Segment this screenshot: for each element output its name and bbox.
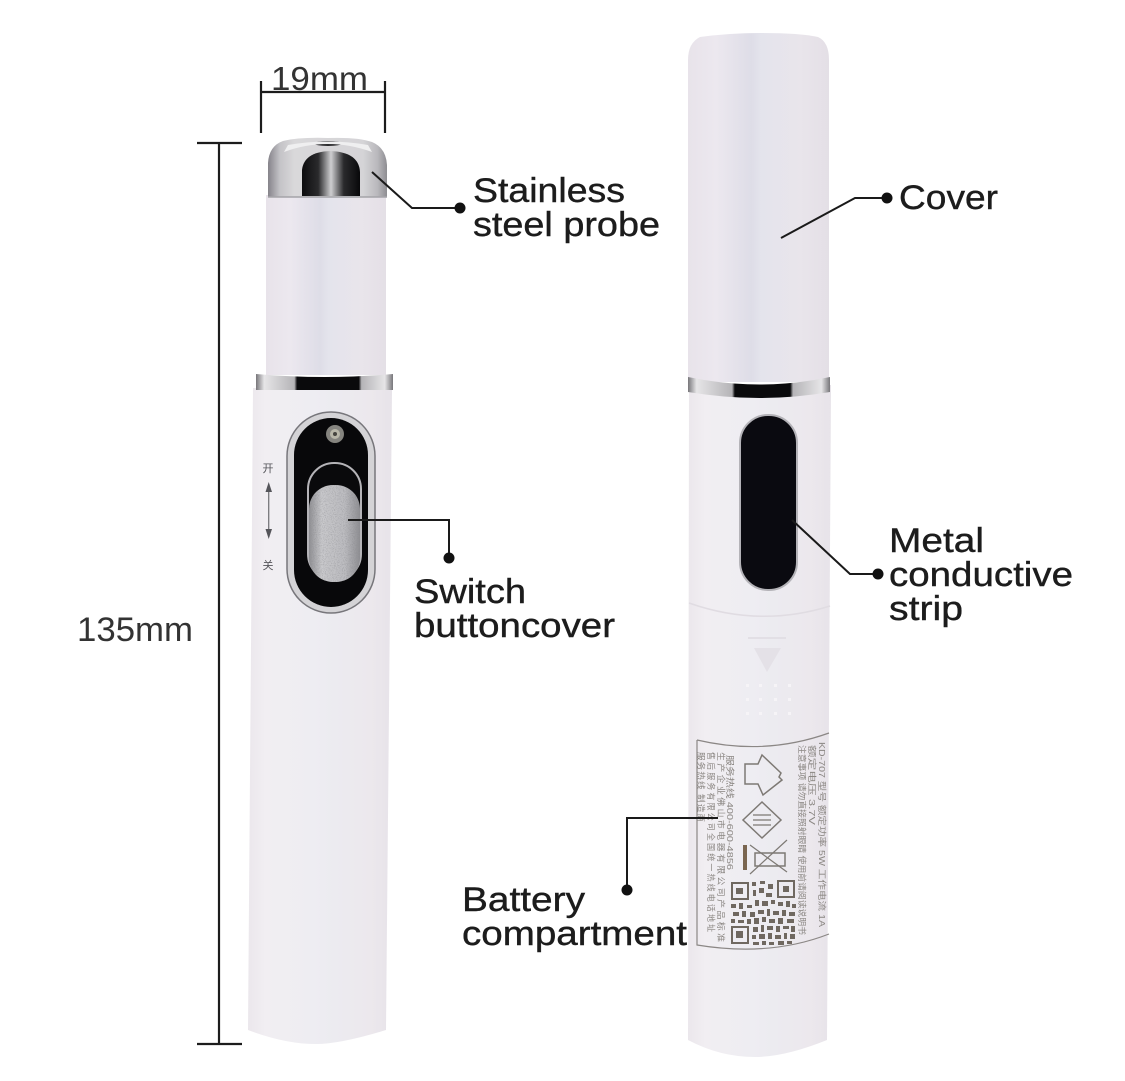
slider track <box>308 463 361 580</box>
label text <box>696 742 827 943</box>
embossed arrow marking <box>746 638 791 715</box>
label text: 生 产 企 业 佛 山 市 电 器 有 限 公 司 产 品 标 准 <box>716 752 726 943</box>
callout: switch button cover <box>348 520 615 645</box>
callout: battery compartment: compartment <box>462 915 688 953</box>
metal conductive strip window <box>740 415 797 590</box>
dimension: 135mm height <box>77 143 242 1044</box>
callout: switch button cover: Switch <box>414 573 526 611</box>
stainless steel probe cap <box>268 138 387 197</box>
silver collar <box>688 377 830 398</box>
dimension: 19mm width: 19mm <box>271 60 368 97</box>
callout: stainless steel probe: steel probe <box>473 206 660 244</box>
callout: switch button cover: buttoncover <box>414 607 615 645</box>
pen cover <box>688 33 829 382</box>
seam between body and battery compartment <box>689 603 830 616</box>
callout: cover: Cover <box>899 179 998 217</box>
pen upper body <box>266 195 386 375</box>
callout: battery compartment <box>462 818 718 953</box>
left pen: front view <box>248 138 393 1044</box>
callout: metal conductive strip: strip <box>889 590 963 628</box>
silver collar <box>256 374 393 390</box>
label text: 注意事项 请勿直接照射眼睛 使用前请阅读说明书 <box>797 745 807 936</box>
pen body <box>688 385 831 1057</box>
label text: 服务热线 制造商 <box>696 752 706 822</box>
label text: 额定电压 3.7V <box>807 745 817 825</box>
label text: 售 后 服 务 有 限 公 司 全 国 统 一 热 线 电 话 地 址 <box>706 752 716 932</box>
callout: battery compartment: Battery <box>462 881 585 919</box>
dimension: 135mm height: 135mm <box>77 611 193 649</box>
on/off markings: 开 <box>262 463 274 475</box>
switch panel <box>287 412 375 613</box>
label text: KD-707 型号 额定功率 5W 工作电流 1A <box>817 742 827 927</box>
on/off markings <box>262 463 274 572</box>
callout: metal conductive strip <box>792 520 1073 628</box>
pen lower body <box>248 388 392 1044</box>
callout: cover <box>781 179 998 238</box>
callout: metal conductive strip: conductive <box>889 556 1073 594</box>
silver switch button <box>309 485 360 582</box>
right pen: back view <box>688 33 831 1057</box>
dimension: 19mm width <box>261 60 385 133</box>
callout: stainless steel probe: Stainless <box>473 172 625 210</box>
indicator light <box>326 425 344 443</box>
on/off markings: 关 <box>262 558 274 572</box>
label text: 服务热线 400-600-4856 <box>725 755 735 870</box>
QR code <box>731 880 796 945</box>
callout: metal conductive strip: Metal <box>889 522 984 560</box>
recycling symbols <box>743 755 787 874</box>
callout: stainless steel probe <box>372 172 660 244</box>
product label <box>696 733 829 949</box>
